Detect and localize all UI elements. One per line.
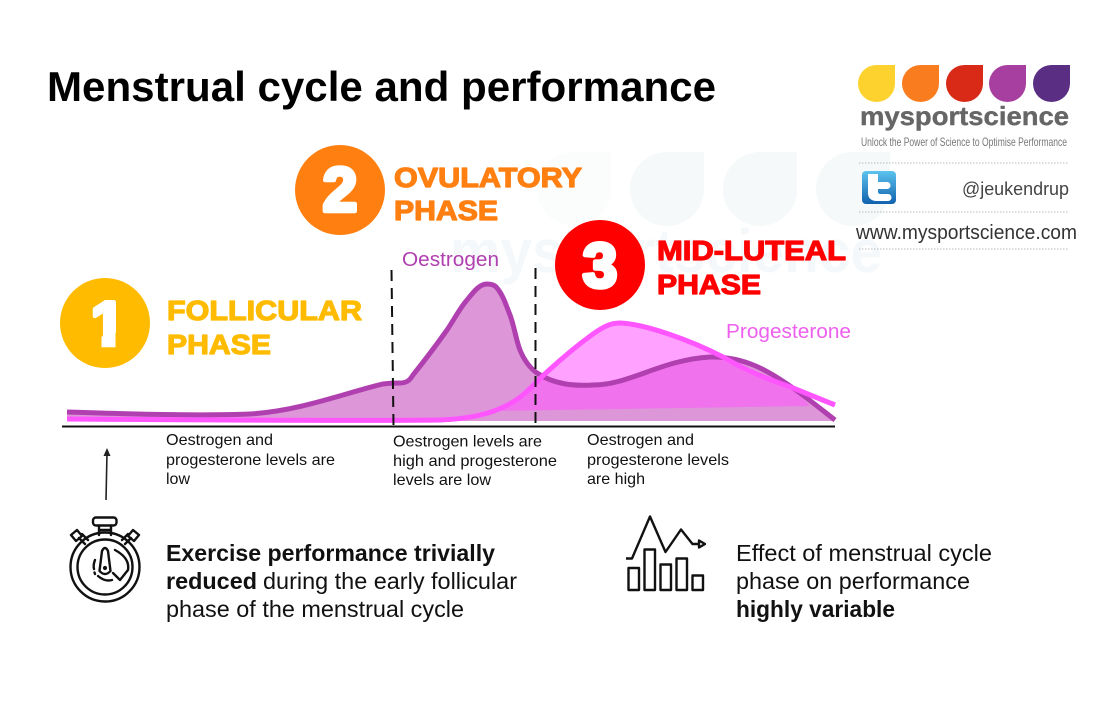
number badge 1 xyxy=(60,278,150,368)
phase 2: ovulatory xyxy=(295,145,582,235)
text: variable effect: phase on performance xyxy=(736,568,970,594)
number badge 3 xyxy=(555,220,645,310)
twitter handle: @jeukendrup xyxy=(962,179,1069,199)
axis xyxy=(62,426,835,428)
title: Menstrual cycle and performance xyxy=(47,63,716,110)
number badge 3: 3 xyxy=(583,232,617,301)
icon: five coloured drops xyxy=(858,65,1070,102)
website: www.mysportscience.com xyxy=(855,222,1077,244)
text: exercise performance: phase of the menstrual cycle xyxy=(166,596,464,622)
number badge 2: 2 xyxy=(323,156,357,225)
phase divider 2 xyxy=(534,268,536,426)
phase 1: follicular xyxy=(60,278,362,368)
mid-luteal description: progesterone levels xyxy=(587,452,729,469)
mid-luteal description: are high xyxy=(587,471,645,488)
progesterone line xyxy=(67,323,835,420)
mid-luteal description: Oestrogen and xyxy=(587,432,694,449)
number badge 2 xyxy=(295,145,385,235)
hormone curve chart xyxy=(62,249,851,426)
heading: FOLLICULAR xyxy=(167,295,362,326)
oestrogen line xyxy=(67,284,835,420)
text: exercise performance: Exercise performance trivially xyxy=(166,540,495,566)
icon: twitter xyxy=(862,171,896,204)
ovulatory description: high and progesterone xyxy=(393,453,557,470)
background watermark: mysportscience xyxy=(450,218,882,285)
text: variable effect: Effect of menstrual cycle xyxy=(736,540,992,566)
arrow: up to early follicular phase xyxy=(104,448,110,500)
text: exercise performance: reduced xyxy=(166,568,257,594)
heading: PHASE xyxy=(167,329,271,360)
text: exercise performance: during the early follicular xyxy=(263,568,517,594)
ovulatory description: Oestrogen levels are xyxy=(393,434,542,450)
logo: mysportscience xyxy=(858,65,1070,149)
progesterone label: Progesterone xyxy=(726,320,851,343)
heading: OVULATORY xyxy=(394,162,582,193)
brand name: mysportscience xyxy=(860,101,1069,131)
heading: PHASE xyxy=(657,269,761,300)
oestrogen label: Oestrogen xyxy=(402,249,499,271)
progesterone area xyxy=(490,323,810,411)
heading: PHASE xyxy=(394,195,498,226)
icon: stopwatch xyxy=(70,518,140,602)
text: variable effect: highly variable xyxy=(736,596,895,622)
background watermark xyxy=(450,152,890,285)
heading: MID-LUTEAL xyxy=(657,235,846,266)
follicular description: low xyxy=(166,471,191,488)
phase 3: mid-luteal xyxy=(555,220,846,310)
follicular description: progesterone levels are xyxy=(166,452,335,469)
oestrogen area xyxy=(67,284,835,421)
ovulatory description: levels are low xyxy=(393,472,492,489)
number badge 1: 1 xyxy=(91,290,125,359)
phase divider 1 xyxy=(392,270,394,426)
icon: bar chart with trend line xyxy=(626,516,705,590)
follicular description: Oestrogen and xyxy=(166,432,273,449)
